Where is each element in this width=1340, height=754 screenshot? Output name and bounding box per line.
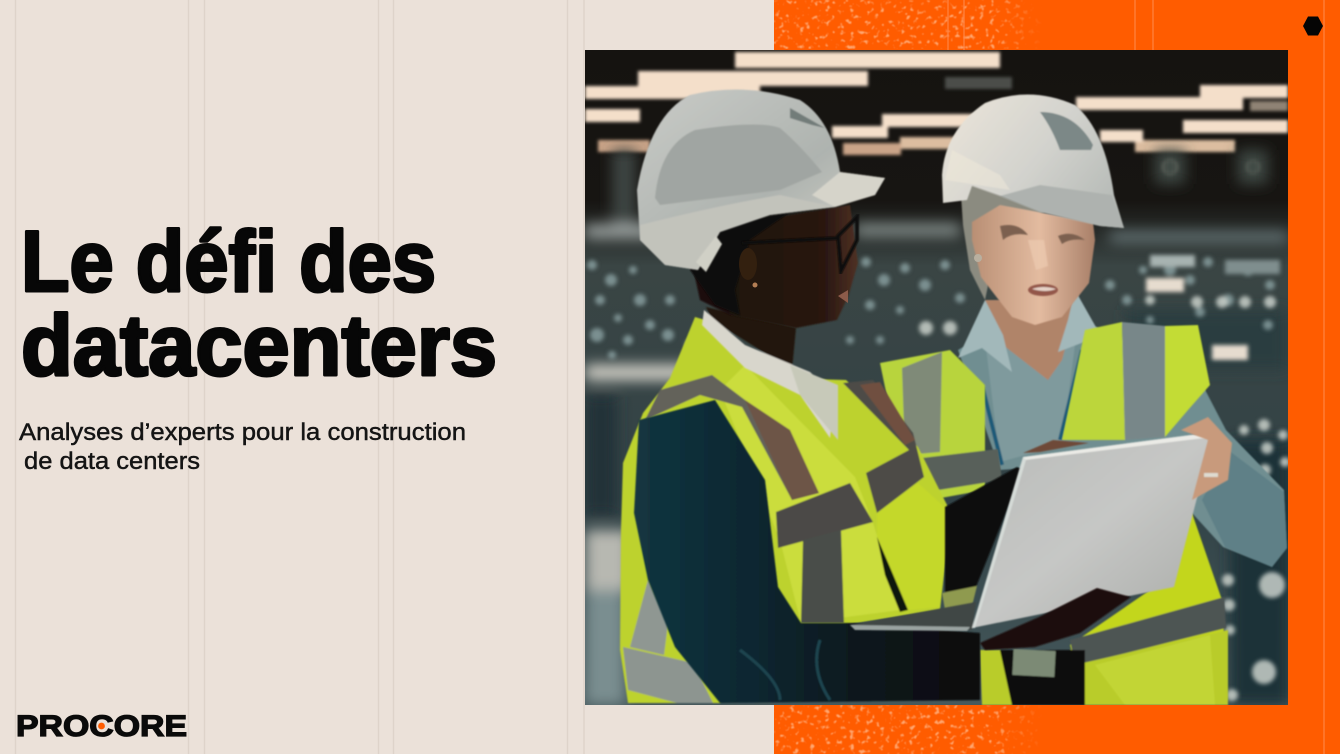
photo background: server bokeh lights bbox=[587, 255, 1290, 701]
title: datacenters bbox=[21, 298, 497, 394]
engineer left: dark sleeve and arm bbox=[634, 400, 1023, 703]
icon: black hexagon bbox=[1303, 16, 1323, 36]
title: Le défi des bbox=[21, 214, 436, 310]
engineer right: badge bbox=[1012, 649, 1056, 677]
photo background: blurred data hall bbox=[585, 50, 1290, 705]
engineer right: shirt collar bbox=[958, 296, 1096, 372]
vest: grey shoulder strap bbox=[645, 374, 792, 498]
vest: grey horizontal band bbox=[776, 483, 873, 548]
vest: grey lower bands bbox=[630, 580, 668, 655]
engineer left: vest bbox=[620, 317, 951, 703]
engineer right: lanyard bbox=[982, 350, 1082, 465]
laptop bbox=[850, 432, 1214, 631]
engineer left: head bbox=[690, 205, 858, 328]
engineer right: neck bbox=[985, 300, 1078, 380]
engineer right: shirt and arm bbox=[958, 290, 1287, 567]
title bbox=[21, 214, 497, 394]
logo: Procore: PROCORE bbox=[16, 710, 187, 743]
subtitle: de data centers bbox=[24, 448, 200, 475]
engineer left: neck and white collar bbox=[702, 307, 838, 440]
hands on laptop bbox=[980, 417, 1232, 650]
orange background panel bbox=[774, 0, 1340, 754]
vest: grey vertical band bbox=[801, 530, 844, 623]
vest: front lime panel bbox=[878, 512, 882, 550]
glasses bbox=[742, 217, 857, 271]
photo: two engineers with a laptop in a data center bbox=[585, 50, 1290, 705]
engineer right: hi-vis vest bbox=[880, 322, 1228, 705]
engineer right: white hard hat bbox=[942, 94, 1124, 228]
vest: right strap bbox=[843, 380, 924, 513]
orange grain texture bbox=[774, 0, 1042, 754]
engineer right: head bbox=[960, 180, 1095, 325]
engineer left: white hard hat bbox=[637, 90, 885, 272]
subtitle: Analyses d’experts pour la construction bbox=[19, 419, 466, 446]
subtitle bbox=[19, 419, 466, 475]
